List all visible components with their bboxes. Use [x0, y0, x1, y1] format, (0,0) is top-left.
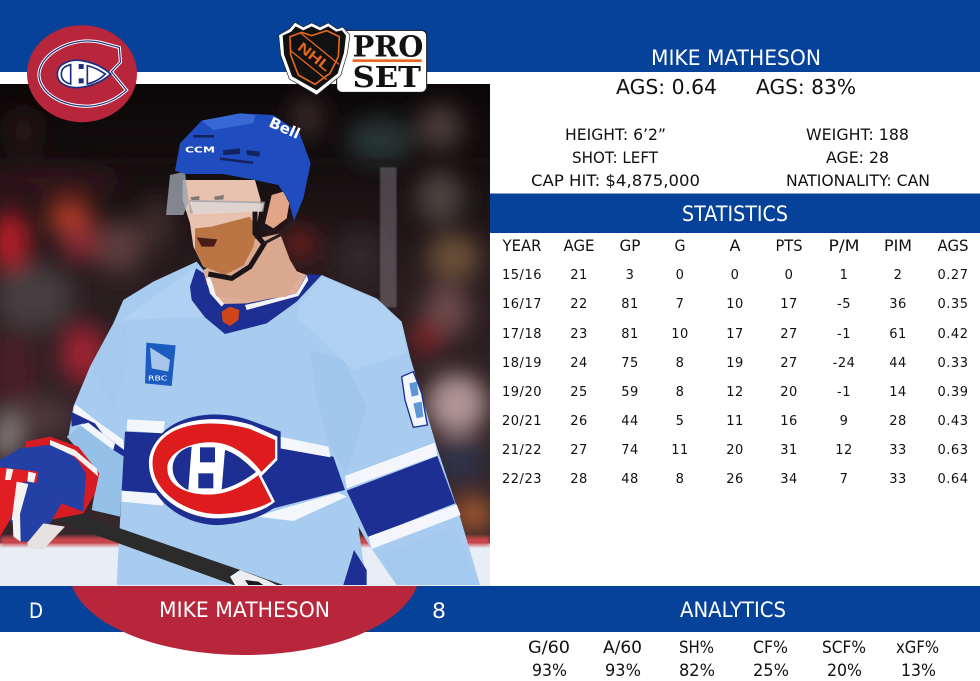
table rows: 5 [676, 414, 684, 429]
table header: AGS [938, 236, 968, 255]
C logo [40, 42, 125, 105]
table rows: 16/17 [502, 297, 542, 312]
table rows: 11 [671, 443, 689, 458]
player head and helmet: CCM [185, 144, 215, 154]
table rows [502, 268, 968, 487]
photo background: blurred crowd [0, 84, 493, 586]
table rows: 0.33 [938, 356, 968, 371]
table rows: 22/23 [502, 472, 542, 487]
SET text: SET [353, 59, 421, 94]
table rows: 18/19 [502, 356, 542, 371]
panel: player bio [531, 125, 930, 190]
table rows: 7 [840, 472, 848, 487]
table rows: 75 [621, 356, 639, 371]
table rows: 0.43 [938, 414, 968, 429]
neck [207, 233, 300, 300]
table rows: 0.39 [938, 385, 968, 400]
NHL shield: NHL [295, 39, 335, 75]
analytics table: 13% [901, 661, 936, 681]
NHL Pro Set logo [279, 22, 427, 95]
beard [195, 217, 257, 275]
right sleeve stripes [347, 456, 455, 537]
table header: PIM [884, 236, 912, 255]
analytics table: 25% [753, 661, 789, 681]
collar: navy yoke [190, 268, 322, 334]
panel: player bio: SHOT: LEFT [572, 148, 658, 167]
table rows: 16 [780, 414, 798, 429]
table header: G [674, 236, 686, 255]
table rows: 33 [889, 472, 907, 487]
table rows: 26 [570, 414, 588, 429]
table header: GP [620, 236, 641, 255]
analytics table: 82% [679, 661, 715, 681]
jersey number: 8 [432, 599, 446, 623]
table rows: 17 [726, 327, 744, 342]
mouth [197, 237, 217, 247]
table rows: 27 [570, 443, 588, 458]
table rows: 27 [780, 356, 798, 371]
skin of neck [203, 268, 306, 304]
table rows: 12 [726, 385, 744, 400]
face [183, 180, 261, 275]
table rows: -5 [837, 297, 851, 312]
table rows: 9 [840, 414, 848, 429]
table rows: 7 [676, 297, 684, 312]
chest stripes [122, 432, 345, 508]
panel: player bio: AGE: 28 [826, 148, 889, 167]
table rows: 24 [570, 356, 588, 371]
table rows: 19 [726, 356, 744, 371]
table rows: 20 [780, 385, 798, 400]
panel: player bio: WEIGHT: 188 [806, 125, 909, 144]
table rows: 28 [889, 414, 907, 429]
player jersey [0, 247, 480, 585]
table rows: 26 [726, 472, 744, 487]
analytics table: SCF% [822, 638, 866, 658]
top blue header band [0, 0, 980, 72]
table rows: 0.42 [938, 327, 968, 342]
table rows: 25 [570, 385, 588, 400]
table rows: 2 [894, 268, 902, 283]
panel: player bio: CAP HIT: $4,875,000 [531, 171, 700, 190]
visor [166, 172, 265, 215]
helmet logos: Bell [266, 114, 303, 143]
analytics table: CF% [753, 638, 788, 658]
position label: D [29, 599, 43, 623]
table rows: 74 [621, 443, 639, 458]
analytics table: 20% [827, 661, 862, 681]
far arm [67, 423, 124, 517]
table rows: 22 [570, 297, 588, 312]
table rows: 15/16 [502, 268, 542, 283]
table rows: 0.35 [938, 297, 968, 312]
analytics table: xGF% [896, 638, 939, 658]
table rows: 14 [889, 385, 907, 400]
chin strap [208, 212, 264, 278]
analytics table: 93% [532, 661, 567, 681]
table rows: 3 [626, 268, 634, 283]
table rows: 12 [835, 443, 853, 458]
table rows: 20/21 [502, 414, 542, 429]
hockey glove [0, 437, 99, 549]
bottom blue band [0, 586, 980, 632]
table header: PTS [776, 236, 802, 255]
ear [265, 192, 289, 228]
statistics band [490, 194, 980, 233]
table rows: 10 [671, 327, 689, 342]
table rows: 17/18 [502, 327, 542, 342]
left sleeve stripes [71, 412, 124, 457]
table rows: 21 [570, 268, 588, 283]
table rows: 31 [780, 443, 798, 458]
table rows: 17 [780, 297, 798, 312]
table header: AGE [564, 236, 594, 255]
table rows: 81 [621, 297, 639, 312]
player head and helmet [166, 113, 311, 300]
panel: player bio: HEIGHT: 6’2” [565, 125, 666, 144]
analytics table: G/60 [528, 638, 570, 658]
panel: player photo [0, 84, 493, 586]
side panel shadow [343, 550, 367, 585]
RBC patch [145, 343, 176, 386]
analytics table: 93% [605, 661, 641, 681]
red name plate arc [72, 586, 417, 655]
table rows: 0.27 [938, 268, 968, 283]
ice surface and boards [0, 543, 490, 586]
white plaque [337, 30, 427, 92]
table rows: 61 [889, 327, 907, 342]
analytics table [528, 638, 939, 681]
table rows: 0 [785, 268, 793, 283]
analytics heading: ANALYTICS [680, 598, 786, 622]
table rows: 27 [780, 327, 798, 342]
table rows: -1 [837, 327, 851, 342]
table rows: 36 [889, 297, 907, 312]
table rows: 8 [676, 356, 684, 371]
table rows: 0 [731, 268, 739, 283]
table header: P/M [828, 236, 860, 255]
statistics band: STATISTICS [682, 202, 788, 226]
table rows: 19/20 [502, 385, 542, 400]
table header: YEAR [502, 236, 542, 255]
table rows: 0 [676, 268, 684, 283]
hockey stick [54, 514, 284, 585]
player name heading: MIKE MATHESON [651, 46, 821, 71]
panel: player name and summary [616, 46, 856, 99]
AGS percentile: AGS: 83% [756, 75, 856, 99]
table rows: 8 [676, 472, 684, 487]
sleeve number [402, 372, 427, 427]
table rows: 0.64 [938, 472, 968, 487]
name plate text: MIKE MATHESON [159, 598, 330, 622]
table rows: 81 [621, 327, 639, 342]
panel: player bio: NATIONALITY: CAN [786, 171, 930, 190]
table rows: -24 [833, 356, 855, 371]
table rows: 28 [570, 472, 588, 487]
analytics table: SH% [679, 638, 714, 658]
NHL shield [279, 22, 350, 95]
table header [502, 236, 968, 255]
PRO text: PRO [353, 29, 423, 64]
RBC patch: RBC [148, 373, 167, 382]
table rows: 48 [621, 472, 639, 487]
table rows: 1 [840, 268, 848, 283]
table rows: 23 [570, 327, 588, 342]
table rows: 44 [621, 414, 639, 429]
table rows: 11 [726, 414, 744, 429]
orange rule [353, 59, 422, 62]
jersey shading [117, 267, 407, 370]
NHL crest on collar [222, 307, 239, 326]
table rows: 33 [889, 443, 907, 458]
chest C logo [148, 415, 281, 525]
table rows: 8 [676, 385, 684, 400]
table header: A [730, 236, 741, 255]
table rows: -1 [837, 385, 851, 400]
table rows: 44 [889, 356, 907, 371]
table rows: 20 [726, 443, 744, 458]
analytics table: A/60 [603, 638, 642, 658]
statistics table [502, 236, 968, 487]
table rows: 34 [780, 472, 798, 487]
eyes [190, 195, 224, 200]
body and sleeves [68, 262, 480, 585]
helmet [175, 113, 311, 221]
table rows: 59 [621, 385, 639, 400]
table rows: 10 [726, 297, 744, 312]
table rows: 21/22 [502, 443, 542, 458]
Montreal team logo [27, 25, 137, 122]
table rows: 0.63 [938, 443, 968, 458]
AGS value: AGS: 0.64 [616, 75, 717, 99]
